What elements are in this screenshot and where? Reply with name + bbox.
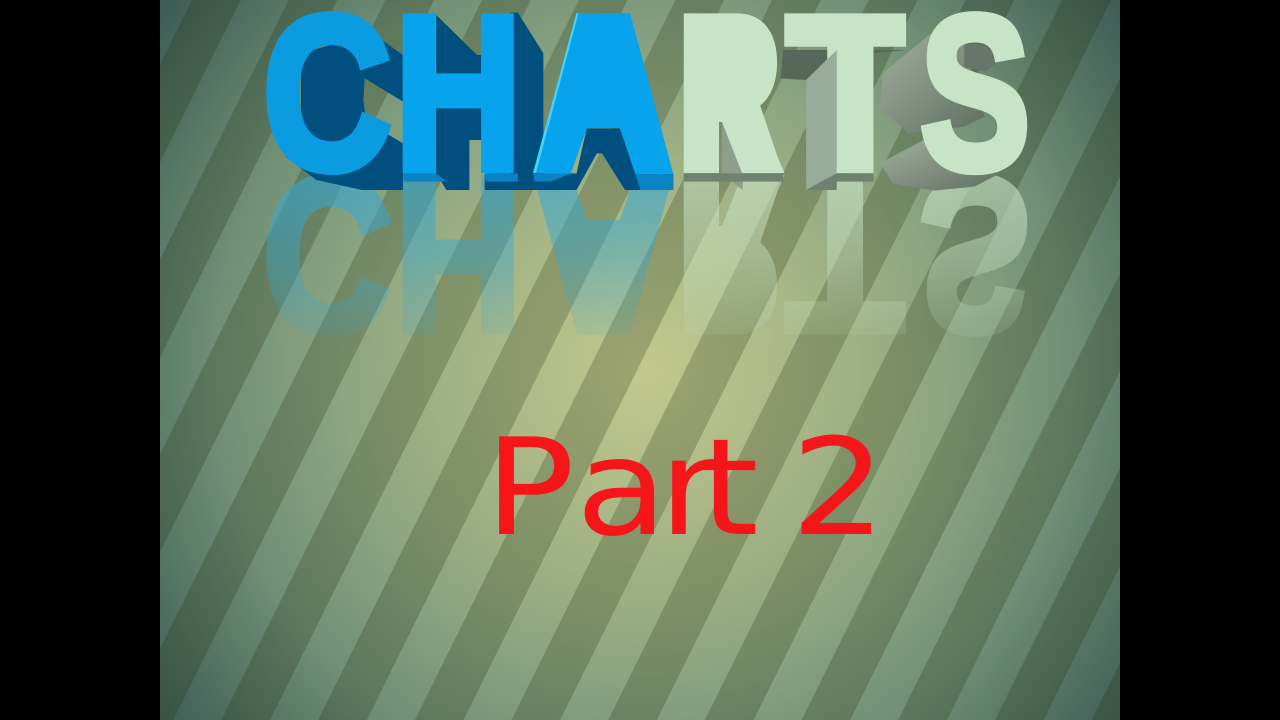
letter faces: R T S [677, 0, 1030, 216]
reflection of the CHARTS title: H [394, 132, 522, 377]
title: CHARTS 3D lettering [266, 11, 1028, 191]
bevel highlight of the A [533, 13, 578, 173]
background: striped radial panel [160, 0, 1120, 720]
3D depth of the pale letters [684, 33, 1020, 191]
reflection of the CHARTS title: C [263, 132, 392, 377]
reflection of the CHARTS title: T [786, 133, 904, 378]
reflection of the CHARTS title: R [677, 132, 782, 376]
reflection of the CHARTS title: S [920, 132, 1030, 377]
solid fill of the A [533, 13, 673, 173]
3D depth of the blue letters [286, 13, 673, 190]
subtitle: Part 2: Part 2 [484, 410, 886, 566]
solid fill of the R [700, 30, 783, 173]
reflection of the CHARTS title [266, 175, 1028, 337]
letter faces: C H [263, 0, 522, 216]
reflection of the CHARTS title: A [537, 133, 669, 378]
stem of the T [806, 43, 873, 190]
